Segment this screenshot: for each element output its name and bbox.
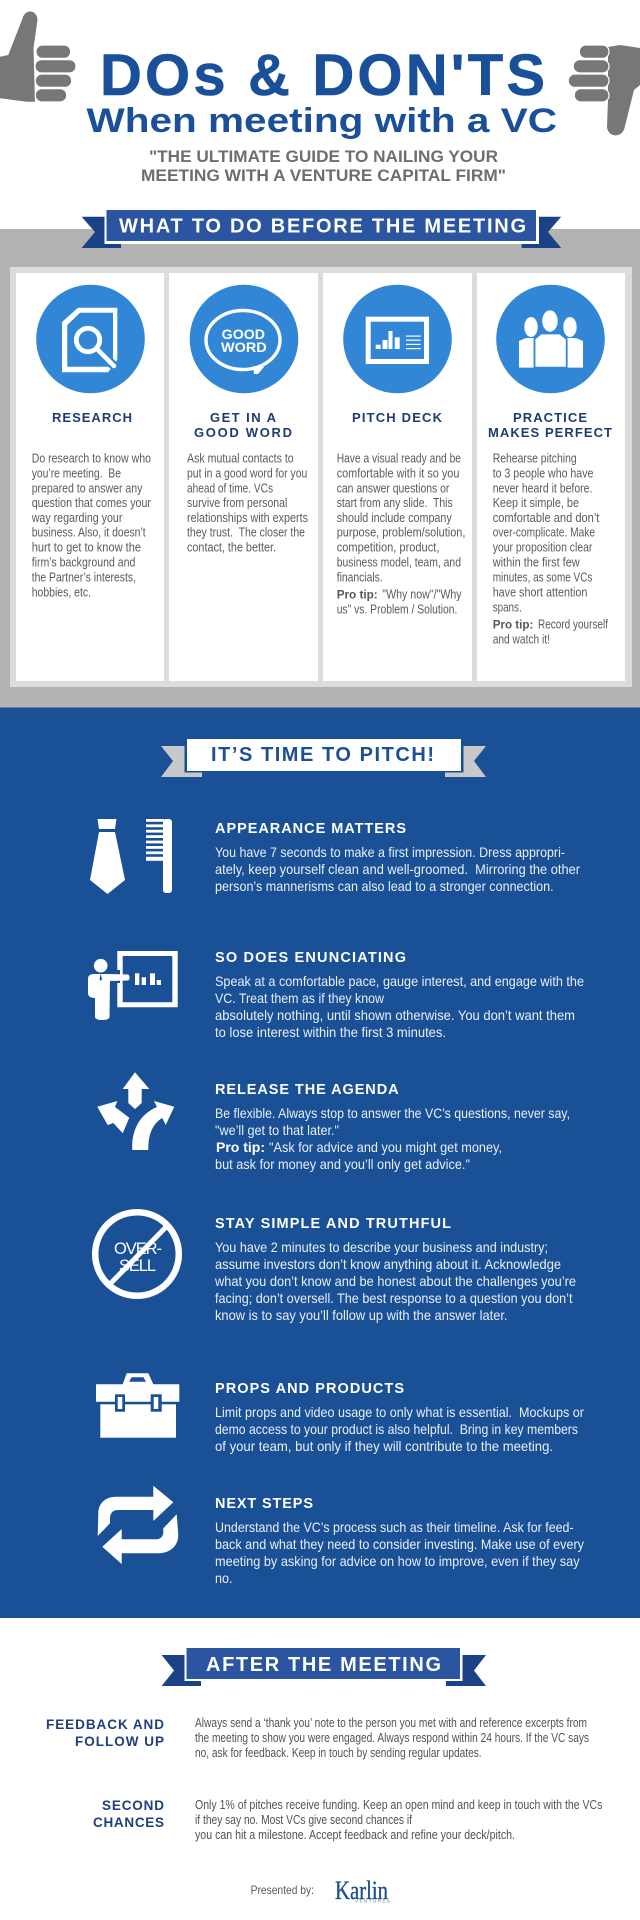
icon: thumbs up — [0, 11, 76, 102]
text: practice body: spans. — [493, 601, 522, 615]
text: practice body: over-complicate. Make — [493, 526, 595, 540]
text: pitch deck body: should include company — [337, 511, 452, 525]
panel: pitch deck: PITCH DECK — [352, 410, 443, 425]
item: appearance matters: APPEARANCE MATTERS — [215, 821, 406, 837]
text: good word body: Ask mutual contacts to — [187, 451, 294, 465]
text: enunciating body: to lose interest within the first 3 minutes. — [215, 1024, 446, 1040]
text: next steps body — [215, 1519, 584, 1586]
icon: briefcase toolbox — [96, 1373, 179, 1438]
banner: what to do before the meeting: WHAT TO DO BEFORE THE MEETING — [119, 216, 526, 238]
item: next steps — [98, 1486, 584, 1586]
icon: three direction arrows — [97, 1072, 174, 1150]
text: research body: Do research to know who — [32, 451, 151, 465]
item: next steps: NEXT STEPS — [215, 1496, 313, 1512]
text: practice body: have short attention — [493, 586, 587, 600]
icon: tie and comb — [90, 819, 172, 894]
panel: research: RESEARCH — [52, 410, 132, 425]
title: When meeting with a VC — [86, 102, 557, 140]
text: practice body: to 3 people who have — [493, 466, 593, 480]
text: enunciating body: absolutely nothing, until shown otherwise. You don’t want them — [215, 1007, 575, 1023]
text: research body — [31, 451, 151, 600]
text: good word body: put in a good word for you — [187, 466, 307, 480]
text: research body: you’re meeting. Be — [32, 466, 121, 480]
text: agenda body: but ask for money and you’ll only get advice." — [215, 1156, 470, 1172]
panel: before the meeting background — [0, 229, 640, 708]
icon: research document — [36, 285, 145, 393]
item: second chances — [93, 1798, 602, 1842]
panel: practice makes perfect: PRACTICE — [513, 410, 587, 425]
text: practice body: and watch it! — [493, 632, 550, 646]
text: research body: question that comes your — [32, 496, 151, 510]
text: good word body: survive from personal — [187, 496, 287, 510]
icon: no overselling: OVER- — [114, 1240, 162, 1258]
item: props and products: PROPS AND PRODUCTS — [215, 1381, 404, 1397]
text: pitch deck body: can answer questions or — [337, 481, 449, 495]
item: appearance matters — [90, 819, 580, 894]
text: appearance body — [215, 844, 580, 894]
text: good word body: relationships with experts — [187, 511, 308, 525]
text: practice body: Pro tip: — [493, 617, 533, 631]
icon: good word speech bubble — [190, 285, 298, 393]
text: props body — [215, 1404, 584, 1454]
text: practice body: within the first few — [492, 556, 580, 570]
item: feedback and follow up: FEEDBACK AND — [46, 1717, 164, 1732]
text: presented by: Presented by: — [251, 1883, 314, 1897]
banner: what to do before the meeting — [82, 210, 561, 248]
panel: research — [16, 273, 164, 681]
icon: no overselling — [95, 1212, 179, 1296]
logo: Karlin Ventures: VENTURES — [355, 1898, 390, 1904]
text: research body: firm’s background and — [32, 556, 135, 570]
text: truthful body: assume investors don’t know anything about it. Acknowledge — [215, 1256, 561, 1272]
text: research body: prepared to answer any — [32, 481, 143, 495]
title: DOs & DON'TS — [100, 43, 545, 108]
panel: practice makes perfect: MAKES PERFECT — [488, 425, 612, 440]
item: feedback and follow up: FOLLOW UP — [75, 1734, 164, 1749]
item: release the agenda — [97, 1072, 570, 1172]
text: truthful body — [214, 1239, 576, 1323]
text: feedback body — [195, 1716, 589, 1760]
item: second chances: CHANCES — [93, 1815, 164, 1830]
text: pitch deck body: business model, team, and — [337, 556, 461, 570]
text: practice body: Rehearse pitching — [493, 451, 577, 465]
text: pitch deck body: Have a visual ready and be — [337, 451, 461, 465]
panel: get in a good word: GET IN A — [210, 410, 277, 425]
icon: thumbs down — [568, 45, 640, 135]
text: next steps body: back and what they need to consider investing. Make use of every — [215, 1536, 584, 1552]
text: enunciating body — [215, 973, 584, 1040]
text: practice body: Record yourself — [538, 617, 608, 631]
text: pitch deck body: competition, product, — [337, 541, 439, 555]
text: enunciating body: Speak at a comfortable pace, gauge interest, and engage with the — [215, 973, 584, 989]
text: truthful body: know is to say you’ll follow up with the answer later. — [215, 1307, 508, 1323]
text: next steps body: meeting by asking for advice on how to improve, even if they say — [215, 1553, 580, 1569]
text: good word body: they trust. The closer the — [187, 526, 305, 540]
text: practice body: comfortable and don’t — [493, 511, 600, 525]
text: second chances body — [195, 1798, 602, 1842]
text: practice body: minutes, as some VCs — [493, 571, 592, 585]
icon: repeat arrows — [98, 1486, 178, 1564]
text: props body: of your team, but only if they will contribute to the meeting. — [215, 1438, 553, 1454]
text: props body: demo access to your product is also helpful. Bring in key members — [215, 1421, 578, 1437]
text: next steps body: no. — [215, 1570, 232, 1586]
icon: three people — [496, 285, 605, 393]
icon: good word speech bubble: WORD — [221, 339, 267, 355]
text: second chances body: you can hit a milestone. Accept feedback and refine your deck/pitch. — [195, 1828, 515, 1842]
banner: it's time to pitch: IT’S TIME TO PITCH! — [211, 744, 434, 766]
text: feedback body: no, ask for feedback. Keep in touch by sending regular updates. — [195, 1746, 482, 1760]
item: props and products — [96, 1373, 584, 1454]
banner: after the meeting: AFTER THE MEETING — [206, 1654, 441, 1676]
item: so does enunciating: SO DOES ENUNCIATING — [215, 950, 406, 966]
text: pitch deck body: start from any slide. This — [337, 496, 453, 510]
text: pitch deck body — [337, 451, 465, 616]
text: pitch deck body: us" vs. Problem / Solution. — [337, 602, 457, 616]
panel: pitch deck — [323, 273, 472, 681]
item: stay simple and truthful — [95, 1212, 576, 1323]
text: enunciating body: VC. Treat them as if they know — [215, 990, 385, 1006]
text: agenda body — [215, 1105, 570, 1172]
text: agenda body: "we’ll get to that later." — [215, 1122, 339, 1138]
text: agenda body: "Ask for advice and you might get money, — [269, 1139, 502, 1155]
text: research body: hurt to get to know the — [32, 541, 141, 555]
logo: Karlin Ventures: Karlin — [335, 1876, 388, 1905]
text: good word body: contact, the better. — [187, 541, 276, 555]
item: so does enunciating — [88, 950, 584, 1040]
panel: get in a good word: GOOD WORD — [194, 425, 292, 440]
item: second chances: SECOND — [102, 1798, 164, 1813]
panel: get in a good word — [169, 273, 318, 681]
text: pitch deck body: comfortable with it so you — [337, 466, 459, 480]
icon: presenter at board — [88, 951, 178, 1020]
text: research body: way regarding your — [31, 511, 122, 525]
text: appearance body: You have 7 seconds to make a first impression. Dress appropri- — [215, 844, 565, 860]
text: truthful body: facing; don’t oversell. The best response to a question you don’t — [215, 1290, 573, 1306]
text: research body: the Partner’s interests, — [32, 571, 136, 585]
item: release the agenda: RELEASE THE AGENDA — [215, 1082, 399, 1098]
subtitle — [141, 147, 506, 185]
panel: it's time to pitch background — [0, 708, 640, 1618]
text: agenda body: Pro tip: — [216, 1139, 265, 1155]
item: stay simple and truthful: STAY SIMPLE AND TRUTHFUL — [215, 1216, 451, 1232]
text: practice body: Keep it simple, be — [493, 496, 579, 510]
icon: good word speech bubble: GOOD — [222, 326, 265, 342]
text: practice body: your proposition clear — [493, 541, 592, 555]
icon: presentation slide — [343, 285, 452, 393]
text: next steps body: Understand the VC’s process such as their timeline. Ask for feed- — [215, 1519, 574, 1535]
text: truthful body: what you don’t know and be honest about the challenges you’re — [214, 1273, 576, 1289]
text: practice body: never heard it before. — [493, 481, 592, 495]
text: pitch deck body: "Why now"/"Why — [382, 587, 462, 601]
text: truthful body: You have 2 minutes to describe your business and industry; — [215, 1239, 548, 1255]
text: good word body: ahead of time. VCs — [187, 481, 273, 495]
text: pitch deck body: Pro tip: — [337, 587, 378, 601]
item: feedback and follow up — [46, 1716, 589, 1760]
text: second chances body: if they say no. Most VCs give second chances if — [195, 1813, 412, 1827]
text: pitch deck body: purpose, problem/solution, — [337, 526, 465, 540]
text: practice body — [492, 451, 608, 646]
banner: it's time to pitch — [161, 739, 486, 777]
title — [86, 43, 557, 140]
text: pitch deck body: financials. — [337, 571, 383, 585]
icon: no overselling: SELL — [119, 1257, 156, 1275]
subtitle: "THE ULTIMATE GUIDE TO NAILING YOUR — [149, 147, 498, 166]
banner: after the meeting — [162, 1648, 486, 1686]
text: good word body — [187, 451, 308, 555]
text: research body: hobbies, etc. — [32, 586, 91, 600]
subtitle: MEETING WITH A VENTURE CAPITAL FIRM" — [141, 166, 506, 185]
text: props body: Limit props and video usage to only what is essential. Mockups or — [215, 1404, 584, 1420]
panel: practice makes perfect — [477, 273, 625, 681]
text: research body: business. Also, it doesn’t — [32, 526, 146, 540]
text: agenda body: Be flexible. Always stop to answer the VC’s questions, never say, — [215, 1105, 570, 1121]
text: appearance body: person’s mannerisms can also lead to a stronger connection. — [215, 878, 554, 894]
text: appearance body: ately, keep yourself clean and well-groomed. Mirroring the other — [215, 861, 580, 877]
